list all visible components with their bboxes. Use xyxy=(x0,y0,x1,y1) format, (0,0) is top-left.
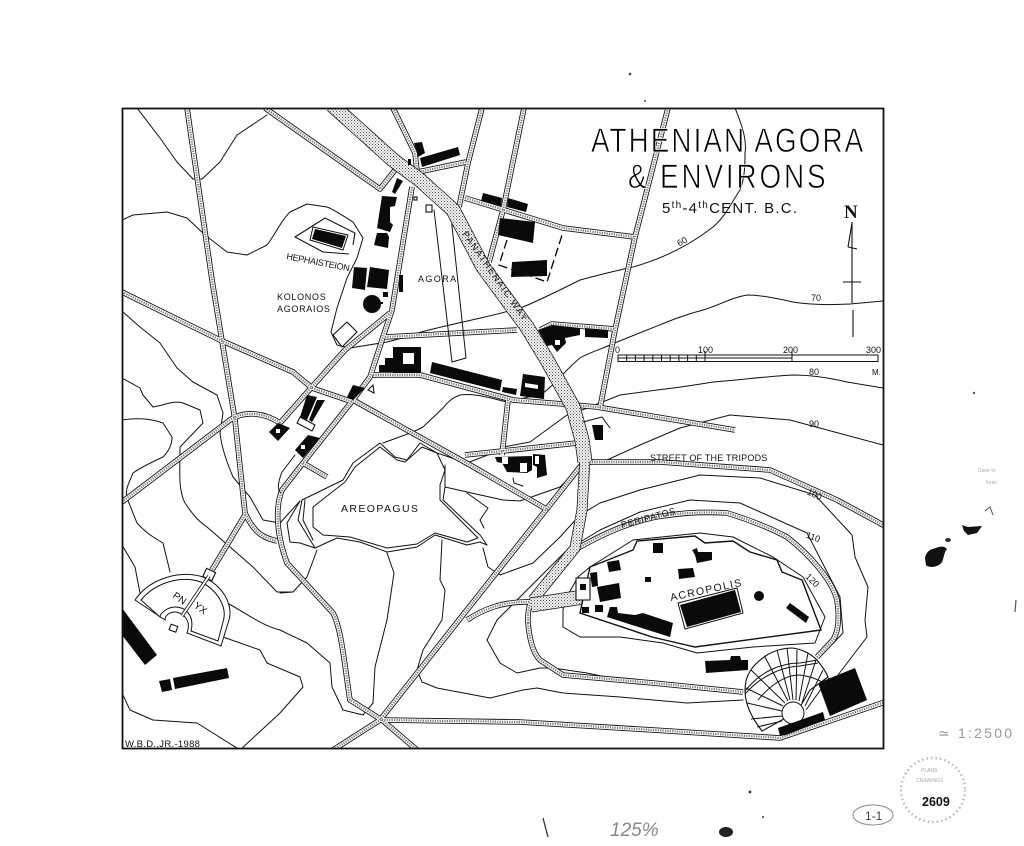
buildings: south slope xyxy=(705,656,867,716)
contour labels: 110 xyxy=(805,530,822,544)
road: Panathenaic Way xyxy=(332,105,585,600)
place labels: HEPHAISTEION xyxy=(286,251,351,273)
panel: Theatre of Dionysos xyxy=(745,648,829,736)
place labels: PANATHENAIC WAY xyxy=(460,229,530,323)
streets network xyxy=(122,108,885,750)
marginalia: handwritten marks: 125% xyxy=(610,820,659,841)
place labels: YX xyxy=(191,600,209,617)
contour lines xyxy=(122,108,883,750)
panel: Panathenaic strip in the Agora xyxy=(434,207,466,362)
contour labels: 70 xyxy=(811,293,821,303)
place labels: AGORAIOS xyxy=(277,304,331,314)
marginalia: library stamp: 2609 xyxy=(922,795,950,809)
north arrow: N xyxy=(844,202,858,223)
scale bar: 0 xyxy=(615,345,620,355)
place labels: AGORA xyxy=(418,274,458,284)
place labels: PERIPATOS xyxy=(620,506,677,530)
place labels: W.B.D.,JR.-1988 xyxy=(125,739,200,750)
marginalia: library stamp: CRAWINGS xyxy=(916,778,944,784)
road: Propylaia ramp xyxy=(531,595,596,605)
map frame xyxy=(122,108,884,748)
Parthenon xyxy=(678,588,743,629)
contour labels: 100 xyxy=(806,487,823,502)
title: -4 xyxy=(682,200,697,217)
buildings: Agora xyxy=(333,142,610,440)
place labels: KOLONOS xyxy=(277,292,326,302)
marginalia: handwritten marks: 1-1 xyxy=(865,809,883,823)
contour labels xyxy=(675,235,823,589)
buildings: north of Areopagus xyxy=(495,454,547,486)
place labels: AREOPAGUS xyxy=(341,503,419,515)
title xyxy=(591,121,863,217)
buildings: west of Pnyx xyxy=(122,608,229,692)
marginalia: library stamp: PLANS xyxy=(921,768,938,774)
scale bar: 300 xyxy=(866,345,881,355)
marginalia: scale note: ≃ 1:2500 xyxy=(938,725,1012,741)
marginalia: handwritten marks: Done to xyxy=(978,468,996,474)
buildings: south-west Agora xyxy=(269,385,374,493)
contour labels: 90 xyxy=(809,419,819,429)
panel: Pnyx xyxy=(135,568,230,646)
title: th xyxy=(672,200,681,211)
scale bar: M. xyxy=(872,368,881,377)
marginalia: handwritten marks xyxy=(543,73,1016,841)
contour labels: 120 xyxy=(804,572,821,589)
scale bar xyxy=(615,345,881,377)
title: ATHENIAN AGORA xyxy=(591,121,863,160)
title: th xyxy=(698,200,708,211)
panel: Acropolis xyxy=(576,536,821,647)
title: & ENVIRONS xyxy=(628,157,826,196)
place labels: STREET OF THE TRIPODS xyxy=(650,453,768,463)
place labels xyxy=(125,229,768,750)
marginalia: handwritten marks: fonts xyxy=(986,480,997,486)
marginalia: library stamp xyxy=(901,758,965,822)
panel: Hephaisteion enclosure xyxy=(295,218,355,254)
contour labels: 80 xyxy=(809,367,819,377)
place labels: ACROPOLIS xyxy=(669,577,744,604)
title: CENT. B.C. xyxy=(709,200,797,217)
place labels: PN xyxy=(170,590,188,607)
scale bar: 200 xyxy=(783,345,798,355)
title: 5 xyxy=(662,200,670,217)
contour labels: 60 xyxy=(675,235,689,248)
scale bar: 100 xyxy=(698,345,713,355)
north arrow xyxy=(843,202,861,337)
